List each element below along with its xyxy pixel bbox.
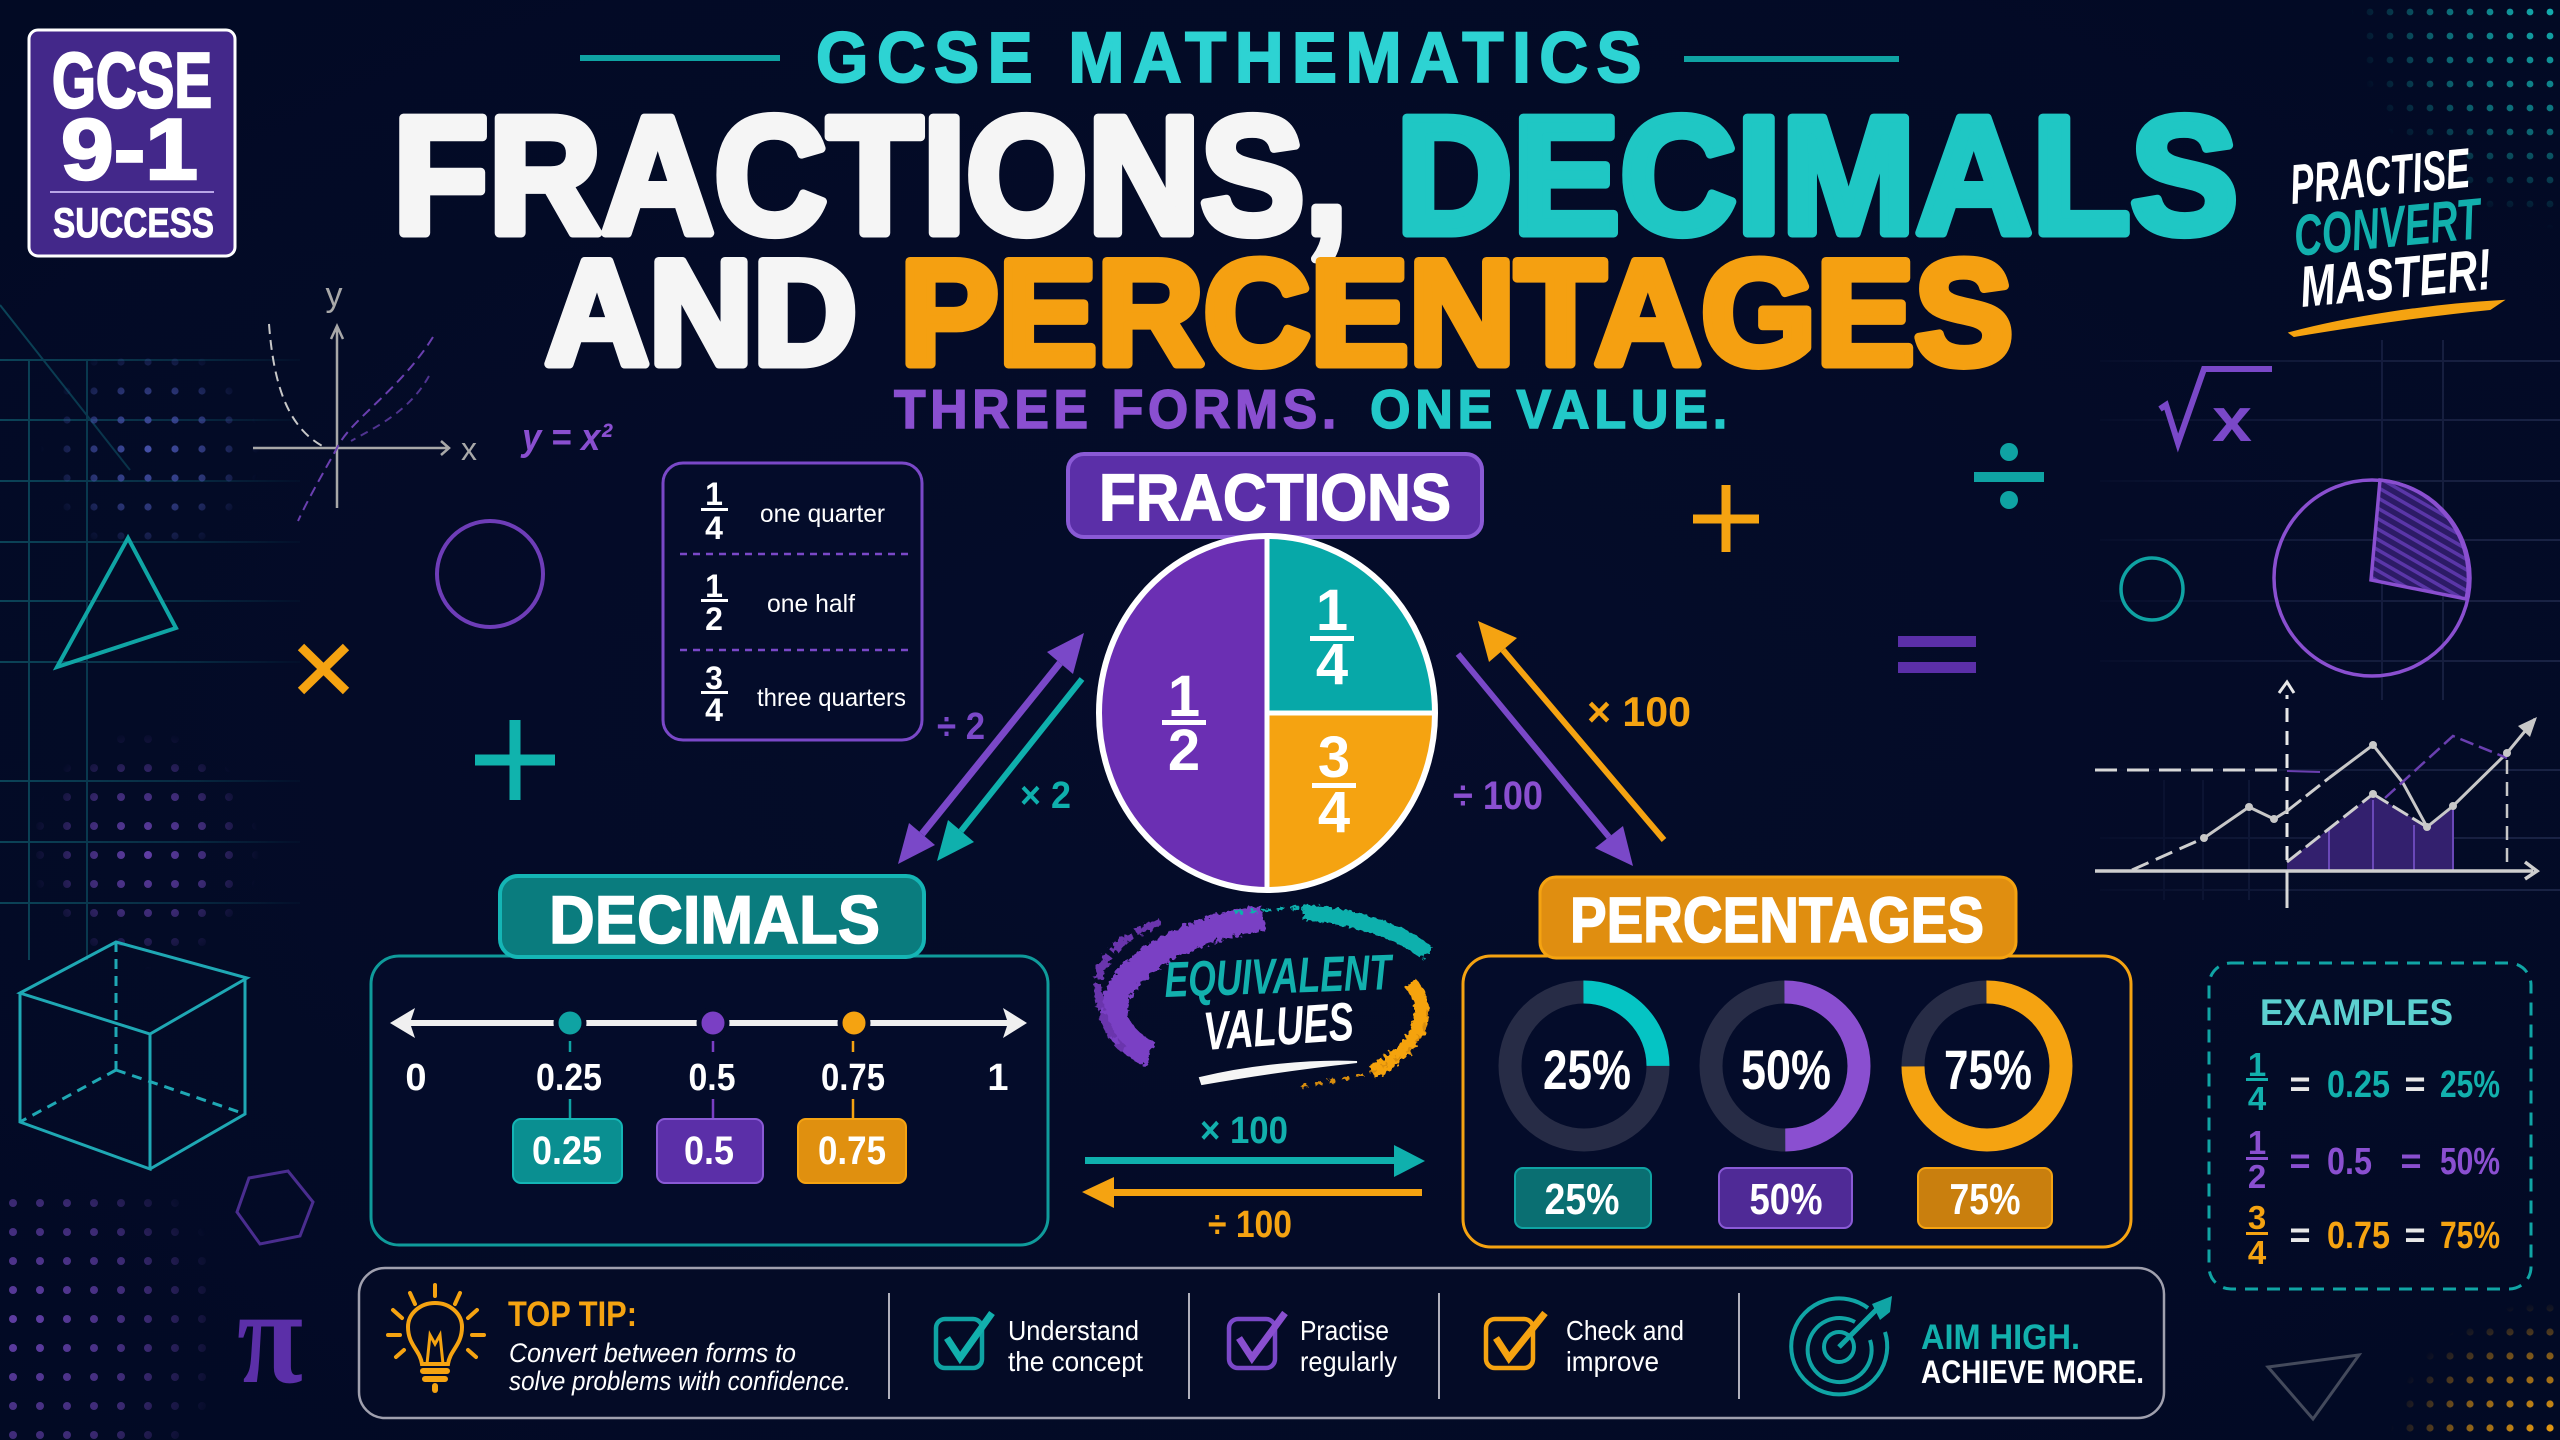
handwritten callout: practise convert master: MASTER! <box>2297 237 2494 320</box>
label: divide by 2: ÷ 2 <box>937 706 985 748</box>
icon: square root of x <box>2160 369 2272 455</box>
icon: hexagon <box>237 1171 313 1244</box>
dot pattern bottom left <box>9 1199 206 1439</box>
arrow: decimals to percentages <box>1085 1145 1425 1177</box>
example row: one half: 0.5 <box>2327 1141 2372 1183</box>
equivalent values callout: EQUIVALENT <box>1163 944 1395 1008</box>
title line 1 <box>393 83 2238 269</box>
title line 1: DECIMALS <box>1396 83 2238 269</box>
donut 25%: 25% <box>1543 1038 1631 1101</box>
example row: one quarter: = <box>2289 1063 2311 1104</box>
icon: multiply <box>301 647 346 691</box>
example row: three quarters: = <box>2289 1214 2311 1255</box>
top tip text <box>508 1295 851 1396</box>
pie label: one quarter: 1 <box>1316 578 1348 643</box>
title line 2: AND <box>545 229 857 396</box>
example row: three quarters: 75% <box>2440 1215 2500 1257</box>
decimal chip 0.25 <box>513 1119 622 1183</box>
icon: target with dart <box>1791 1296 1892 1394</box>
icon: divide <box>1974 443 2044 509</box>
handwritten callout: practise convert master <box>2287 136 2502 336</box>
checklist: understand the concept: Understand <box>1008 1315 1139 1346</box>
number line: 0.25 <box>536 1057 602 1099</box>
example row: three quarters <box>2246 1199 2500 1271</box>
checklist: practise regularly <box>1229 1313 1397 1377</box>
background grid left <box>0 305 300 960</box>
percent chip 75% <box>1918 1168 2052 1228</box>
icon: cube <box>20 942 247 1169</box>
number line: 1 <box>987 1057 1009 1099</box>
label: times 100 teal: × 100 <box>1200 1110 1288 1152</box>
number line: 0.5 <box>688 1057 736 1099</box>
checklist: practise regularly: Practise <box>1300 1315 1389 1346</box>
example row: one quarter: 1 <box>2248 1046 2266 1083</box>
aim high text <box>1921 1318 2144 1390</box>
badge: GCSE 9-1 success: GCSE <box>52 36 212 124</box>
key row: one quarter: one quarter <box>760 500 885 528</box>
example row: one half: 2 <box>2248 1158 2266 1195</box>
pie label: one quarter <box>1310 578 1354 697</box>
pie label: one half: 2 <box>1168 718 1200 783</box>
arrow: percentages to fractions, orange <box>1478 621 1664 840</box>
pie chart: fractions <box>1099 536 1435 890</box>
checklist: understand the concept: the concept <box>1008 1346 1143 1377</box>
bottom tip bar <box>359 1268 2164 1418</box>
top tip text: solve problems with confidence. <box>509 1366 851 1396</box>
percentages label: PERCENTAGES <box>1570 884 1984 956</box>
title line 1: FRACTIONS, <box>393 83 1348 269</box>
label: times 2: × 2 <box>1020 775 1071 817</box>
badge: GCSE 9-1 success: SUCCESS <box>53 199 214 246</box>
badge: GCSE 9-1 success: 9-1 <box>61 102 198 198</box>
key row: three quarters: three quarters <box>757 684 906 712</box>
subtitle: ONE VALUE. <box>1370 378 1732 440</box>
icon: square root of x: x <box>2212 386 2253 455</box>
fractions key panel <box>663 463 922 740</box>
eyebrow heading: GCSE Mathematics: GCSE MATHEMATICS <box>816 19 1650 98</box>
example row: one quarter: 4 <box>2248 1080 2267 1117</box>
arrow: decimals, teal <box>937 679 1082 861</box>
checklist: understand the concept <box>936 1313 1143 1377</box>
line chart decoration <box>2095 682 2537 908</box>
background grid right <box>2156 340 2560 900</box>
key row: three quarters <box>701 660 906 728</box>
top tip text: TOP TIP: <box>508 1295 637 1334</box>
example row: one half <box>2246 1124 2500 1195</box>
arrow: percentages to decimals <box>1082 1177 1422 1208</box>
example row: one half: = <box>2400 1140 2422 1181</box>
pie label: three quarters: 4 <box>1318 780 1350 845</box>
icon: lightbulb <box>388 1285 484 1390</box>
donut 50% <box>1711 992 1859 1140</box>
dot pattern middle left <box>36 736 254 946</box>
key row: one half: one half <box>767 590 855 618</box>
percent chip 50% <box>1719 1168 1852 1228</box>
percent chip 25%: 25% <box>1544 1175 1620 1224</box>
icon: coordinate axes graph <box>253 276 477 521</box>
icon: faint triangle <box>2268 1355 2359 1419</box>
decimal chip 0.75: 0.75 <box>818 1129 886 1173</box>
aim high text: AIM HIGH. <box>1921 1318 2080 1357</box>
fractions label: FRACTIONS <box>1099 460 1451 534</box>
example row: three quarters: 0.75 <box>2327 1215 2390 1257</box>
label: divide by 100 orange: ÷ 100 <box>1208 1204 1292 1246</box>
key row: one half: 1 <box>705 568 723 604</box>
example row: one quarter: = <box>2404 1063 2426 1104</box>
arrow: fractions to percentages, purple <box>1458 654 1633 866</box>
percentages panel <box>1463 877 2131 1247</box>
key row: one quarter: 1 <box>705 476 723 512</box>
equivalent values callout: VALUES <box>1202 992 1355 1062</box>
dot pattern top right <box>2366 8 2554 208</box>
equivalent values callout <box>1098 907 1428 1086</box>
label: divide by 100 purple: ÷ 100 <box>1453 774 1543 818</box>
key row: one half <box>701 568 855 637</box>
pie label: one half: 1 <box>1168 664 1200 729</box>
pie label: one quarter: 4 <box>1316 632 1348 697</box>
dot pattern top left <box>64 358 254 540</box>
donut 75%: 75% <box>1944 1038 2032 1101</box>
decimals label: DECIMALS <box>549 882 880 958</box>
example row: one half: 1 <box>2248 1124 2266 1161</box>
checklist: practise regularly: regularly <box>1300 1346 1397 1377</box>
icon: coordinate axes graph: y <box>326 276 342 314</box>
decimal chip 0.5 <box>657 1119 763 1183</box>
badge: GCSE 9-1 success <box>29 30 235 256</box>
example row: one quarter: 25% <box>2440 1064 2500 1106</box>
icon: equals <box>1898 636 1976 673</box>
example row: three quarters: 3 <box>2248 1199 2266 1236</box>
icon: triangle <box>57 538 176 667</box>
arrow: fractions to decimals, purple double <box>898 633 1084 864</box>
icon: plus teal <box>475 720 555 800</box>
example row: one quarter: 0.25 <box>2327 1064 2390 1106</box>
example row: one half: 50% <box>2440 1141 2500 1183</box>
number line <box>390 1008 1027 1118</box>
checklist: check and improve: Check and <box>1566 1315 1684 1346</box>
top tip text: Convert between forms to <box>509 1338 796 1368</box>
examples panel <box>2209 963 2531 1289</box>
pie label: one half <box>1162 664 1206 783</box>
decimals panel <box>371 876 1048 1245</box>
decimal chip 0.5: 0.5 <box>684 1129 734 1173</box>
checklist: check and improve <box>1486 1313 1684 1377</box>
examples panel: EXAMPLES <box>2260 992 2453 1033</box>
key row: one quarter: 4 <box>705 510 723 546</box>
percent chip 25% <box>1515 1168 1651 1228</box>
example row: one half: = <box>2289 1140 2311 1181</box>
key row: three quarters: 4 <box>705 692 723 728</box>
pie label: three quarters <box>1312 725 1356 845</box>
subtitle: THREE FORMS. <box>894 378 1341 440</box>
donut 25% <box>1510 992 1658 1140</box>
example row: three quarters: = <box>2404 1214 2426 1255</box>
key row: three quarters: 3 <box>705 660 723 696</box>
key row: one half: 2 <box>705 601 723 637</box>
title line 2: PERCENTAGES <box>900 229 2013 396</box>
number line: 0.75 <box>821 1057 885 1099</box>
chalk ring <box>1098 907 1428 1086</box>
aim high text: ACHIEVE MORE. <box>1921 1354 2144 1390</box>
label: times 100 orange: × 100 <box>1587 688 1691 735</box>
icon: small circle <box>2121 558 2183 620</box>
percent chip 50%: 50% <box>1750 1175 1822 1224</box>
decimal chip 0.25: 0.25 <box>532 1129 602 1173</box>
eyebrow heading: GCSE Mathematics <box>580 19 1899 98</box>
decimal chip 0.75 <box>798 1119 906 1183</box>
donut 75% <box>1913 992 2061 1140</box>
icon: plus orange <box>1693 485 1759 552</box>
icon: circle <box>437 521 543 627</box>
key row: one quarter <box>701 476 885 546</box>
donut 50%: 50% <box>1741 1038 1831 1101</box>
example row: one quarter <box>2246 1046 2500 1117</box>
example row: three quarters: 4 <box>2248 1234 2267 1271</box>
equation y = x squared: y = x² <box>520 417 613 459</box>
dot pattern bottom right <box>2406 1304 2554 1432</box>
icon: pi: π <box>237 1262 303 1412</box>
icon: coordinate axes graph: x <box>461 431 477 467</box>
subtitle <box>894 378 1732 440</box>
percent chip 75%: 75% <box>1950 1175 2020 1224</box>
pie label: three quarters: 3 <box>1318 725 1350 790</box>
number line: 0 <box>405 1057 427 1099</box>
checklist: check and improve: improve <box>1566 1346 1659 1377</box>
icon: pie outline <box>2274 480 2470 676</box>
